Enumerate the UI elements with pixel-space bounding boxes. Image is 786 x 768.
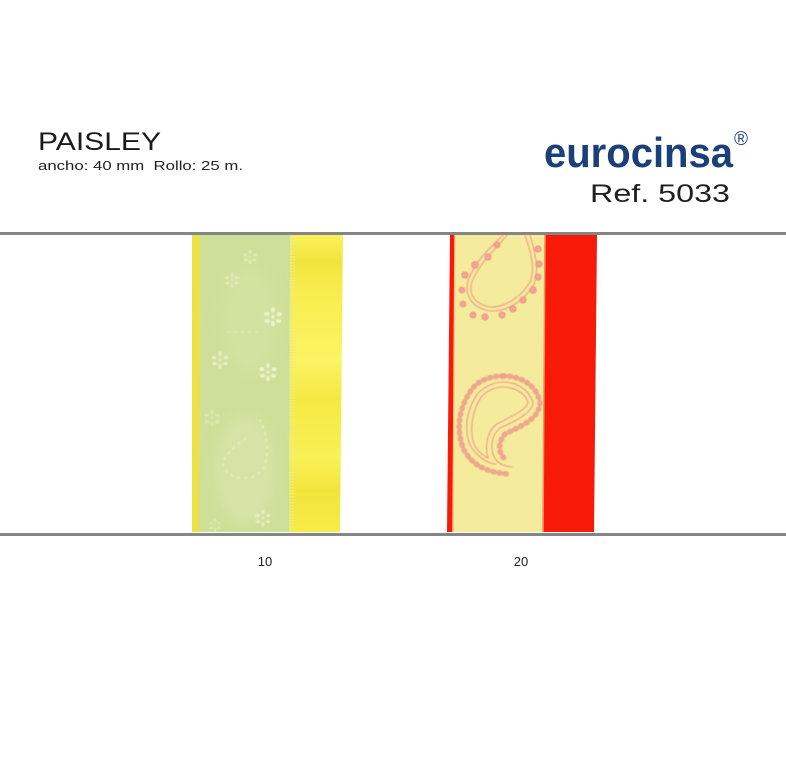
- top divider: [0, 232, 786, 235]
- embossed flowers: [204, 250, 282, 532]
- ribbon 10: yellow and green: [192, 235, 343, 532]
- title: PAISLEY: [38, 128, 161, 156]
- bottom divider: [0, 533, 786, 536]
- embossed paisley motifs: [223, 332, 267, 478]
- colour code 10: 10: [258, 554, 272, 569]
- colour code 20: 20: [514, 554, 528, 569]
- subtitle: ribbon width and roll length: ancho: 40 mm Rollo: 25 m.: [38, 159, 243, 173]
- paisley motif, bottom: [459, 376, 540, 474]
- reference number: Ref. 5033: [590, 180, 730, 208]
- paisley motif, top: [459, 235, 542, 320]
- logo: eurocinsa: ®: [734, 129, 748, 150]
- logo: eurocinsa: eurocinsa: [544, 129, 734, 176]
- ribbon 20: red and cream: [447, 235, 597, 532]
